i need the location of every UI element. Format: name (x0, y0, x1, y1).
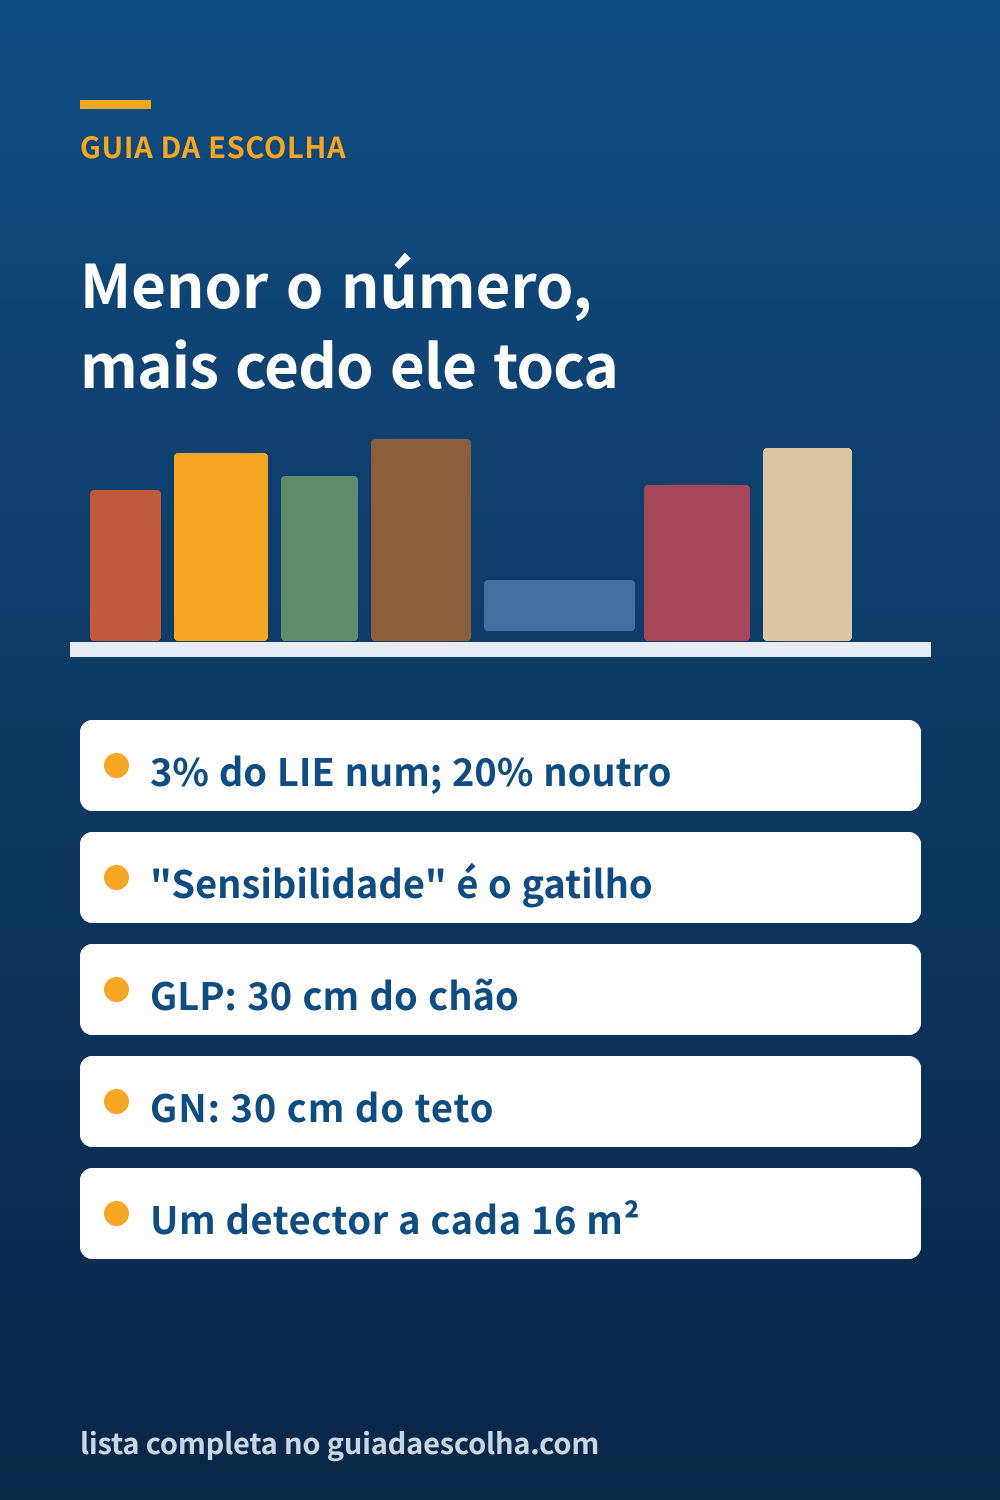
card background and bullet dot (80, 720, 921, 811)
card: LIE (80, 720, 921, 811)
card background and bullet dot (80, 1168, 921, 1259)
book: brown (371, 439, 471, 641)
book: beige (763, 448, 852, 641)
book: terracotta (90, 490, 161, 641)
book: orange (174, 453, 268, 641)
book: green (281, 476, 358, 641)
footer: lista completa no guiadaescolha.com (80, 1421, 599, 1463)
title (80, 239, 618, 406)
card text: 3% do LIE num; 20% noutro (150, 742, 672, 797)
eyebrow label: GUIA DA ESCOLHA (80, 125, 346, 167)
card: GN (80, 1056, 921, 1147)
book: blue lying flat (484, 580, 635, 631)
accent bar (80, 100, 151, 109)
card: detector (80, 1168, 921, 1259)
bar chart: books on a shelf (70, 439, 931, 657)
card: sensibilidade (80, 832, 921, 923)
book: crimson (644, 485, 750, 641)
title: mais cedo ele toca (80, 319, 618, 406)
card text: GLP: 30 cm do chão (150, 966, 519, 1021)
shelf (70, 642, 931, 657)
card: GLP (80, 944, 921, 1035)
card background and bullet dot (80, 832, 921, 923)
card text: GN: 30 cm do teto (150, 1078, 494, 1133)
title: Menor o número, (80, 239, 592, 326)
card text: Um detector a cada 16 m² (150, 1190, 640, 1245)
card background and bullet dot (80, 944, 921, 1035)
card background and bullet dot (80, 1056, 921, 1147)
card text: "Sensibilidade" é o gatilho (150, 854, 653, 909)
